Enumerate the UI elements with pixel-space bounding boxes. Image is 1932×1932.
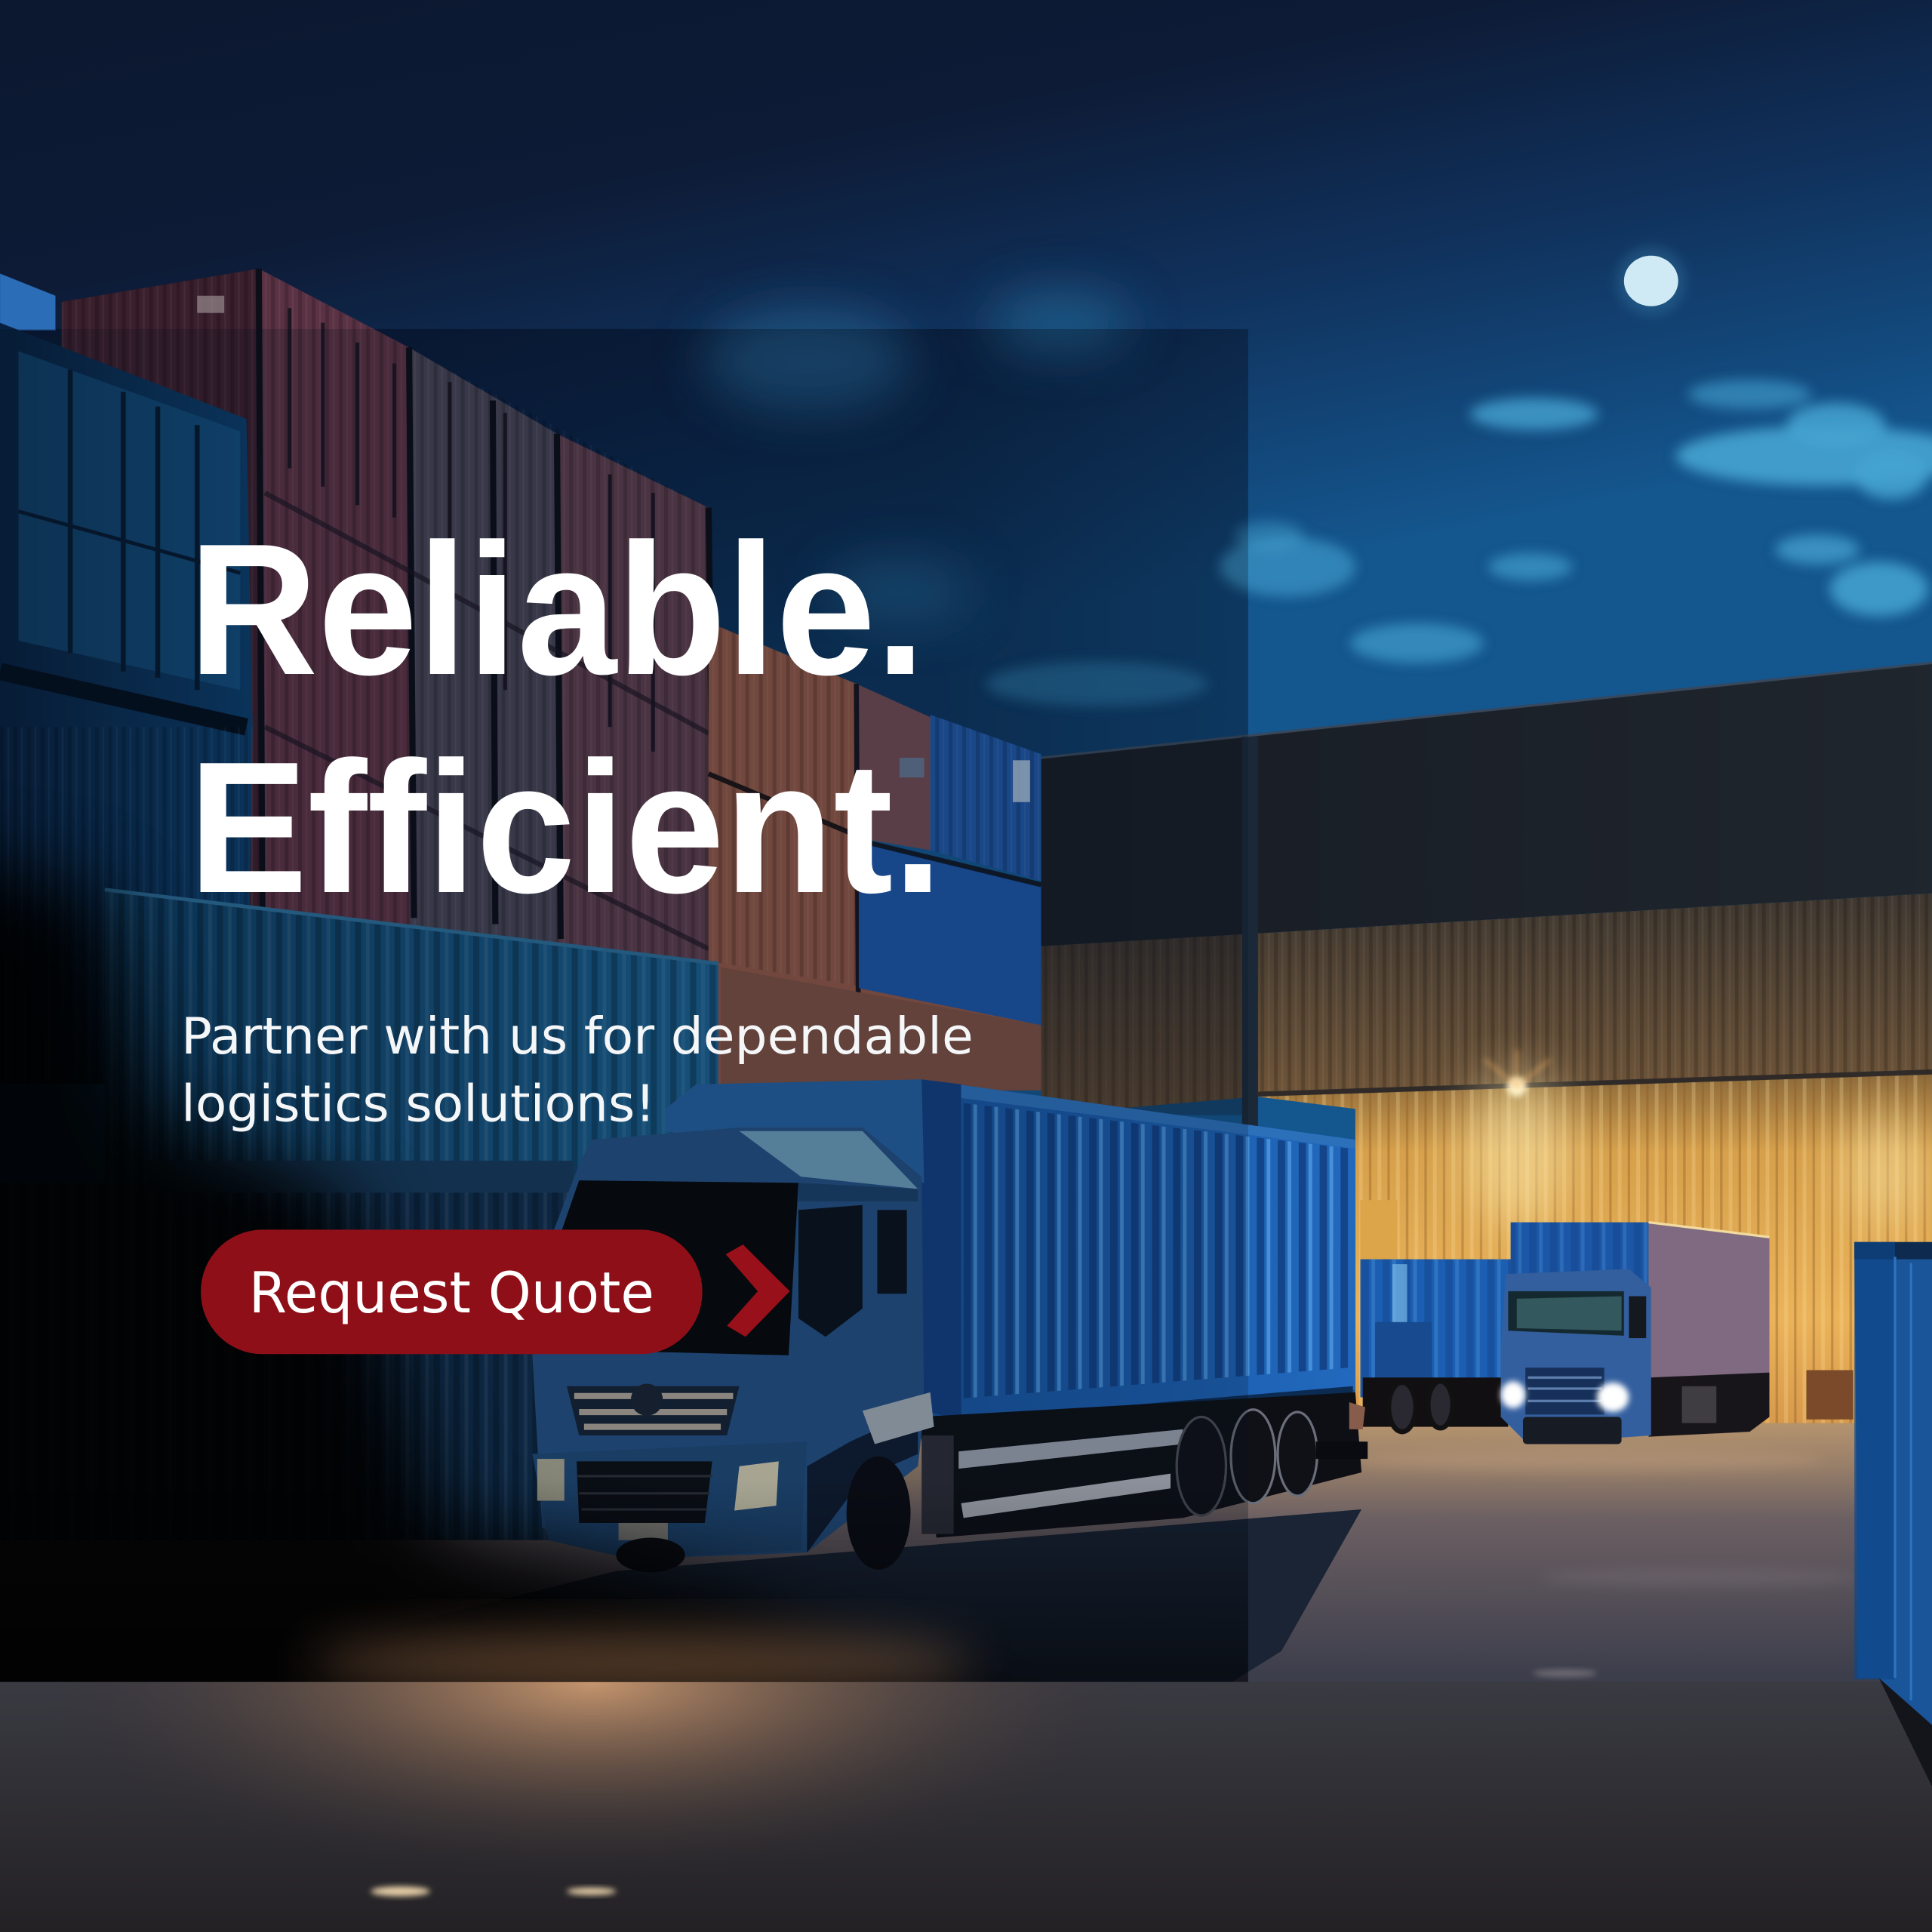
floor light in panel xyxy=(308,1632,974,1696)
title: Efficient. xyxy=(189,722,943,932)
trailer xyxy=(918,1079,1367,1538)
title xyxy=(189,504,943,932)
title: Reliable. xyxy=(189,504,925,714)
warehouse xyxy=(1041,663,1932,1423)
ground xyxy=(0,1417,1932,1932)
call-to-action button xyxy=(201,1229,703,1354)
main truck xyxy=(532,1079,1367,1572)
right blue containers xyxy=(721,715,1041,1091)
foreground right container xyxy=(1854,1242,1932,1786)
arrow chevron xyxy=(726,1244,790,1337)
back maroon row xyxy=(62,269,721,1084)
cab xyxy=(532,1079,934,1572)
clouds xyxy=(703,291,1932,706)
subtitle: logistics solutions! xyxy=(181,1075,656,1134)
orange mid row xyxy=(709,622,1041,1091)
container stacks xyxy=(0,269,1041,1540)
distant truck xyxy=(1501,1223,1769,1444)
left blue stack xyxy=(0,323,253,1084)
lower teal container xyxy=(0,890,718,1540)
subtitle xyxy=(181,1007,974,1134)
main truck shadow xyxy=(296,1509,1361,1682)
blue tank top-left xyxy=(0,273,55,331)
rear trailer xyxy=(1360,1260,1511,1432)
moon xyxy=(1617,247,1685,315)
translucent dark panel xyxy=(0,329,1248,1749)
call-to-action button: Request Quote xyxy=(249,1260,654,1326)
subtitle: Partner with us for dependable xyxy=(181,1007,974,1066)
